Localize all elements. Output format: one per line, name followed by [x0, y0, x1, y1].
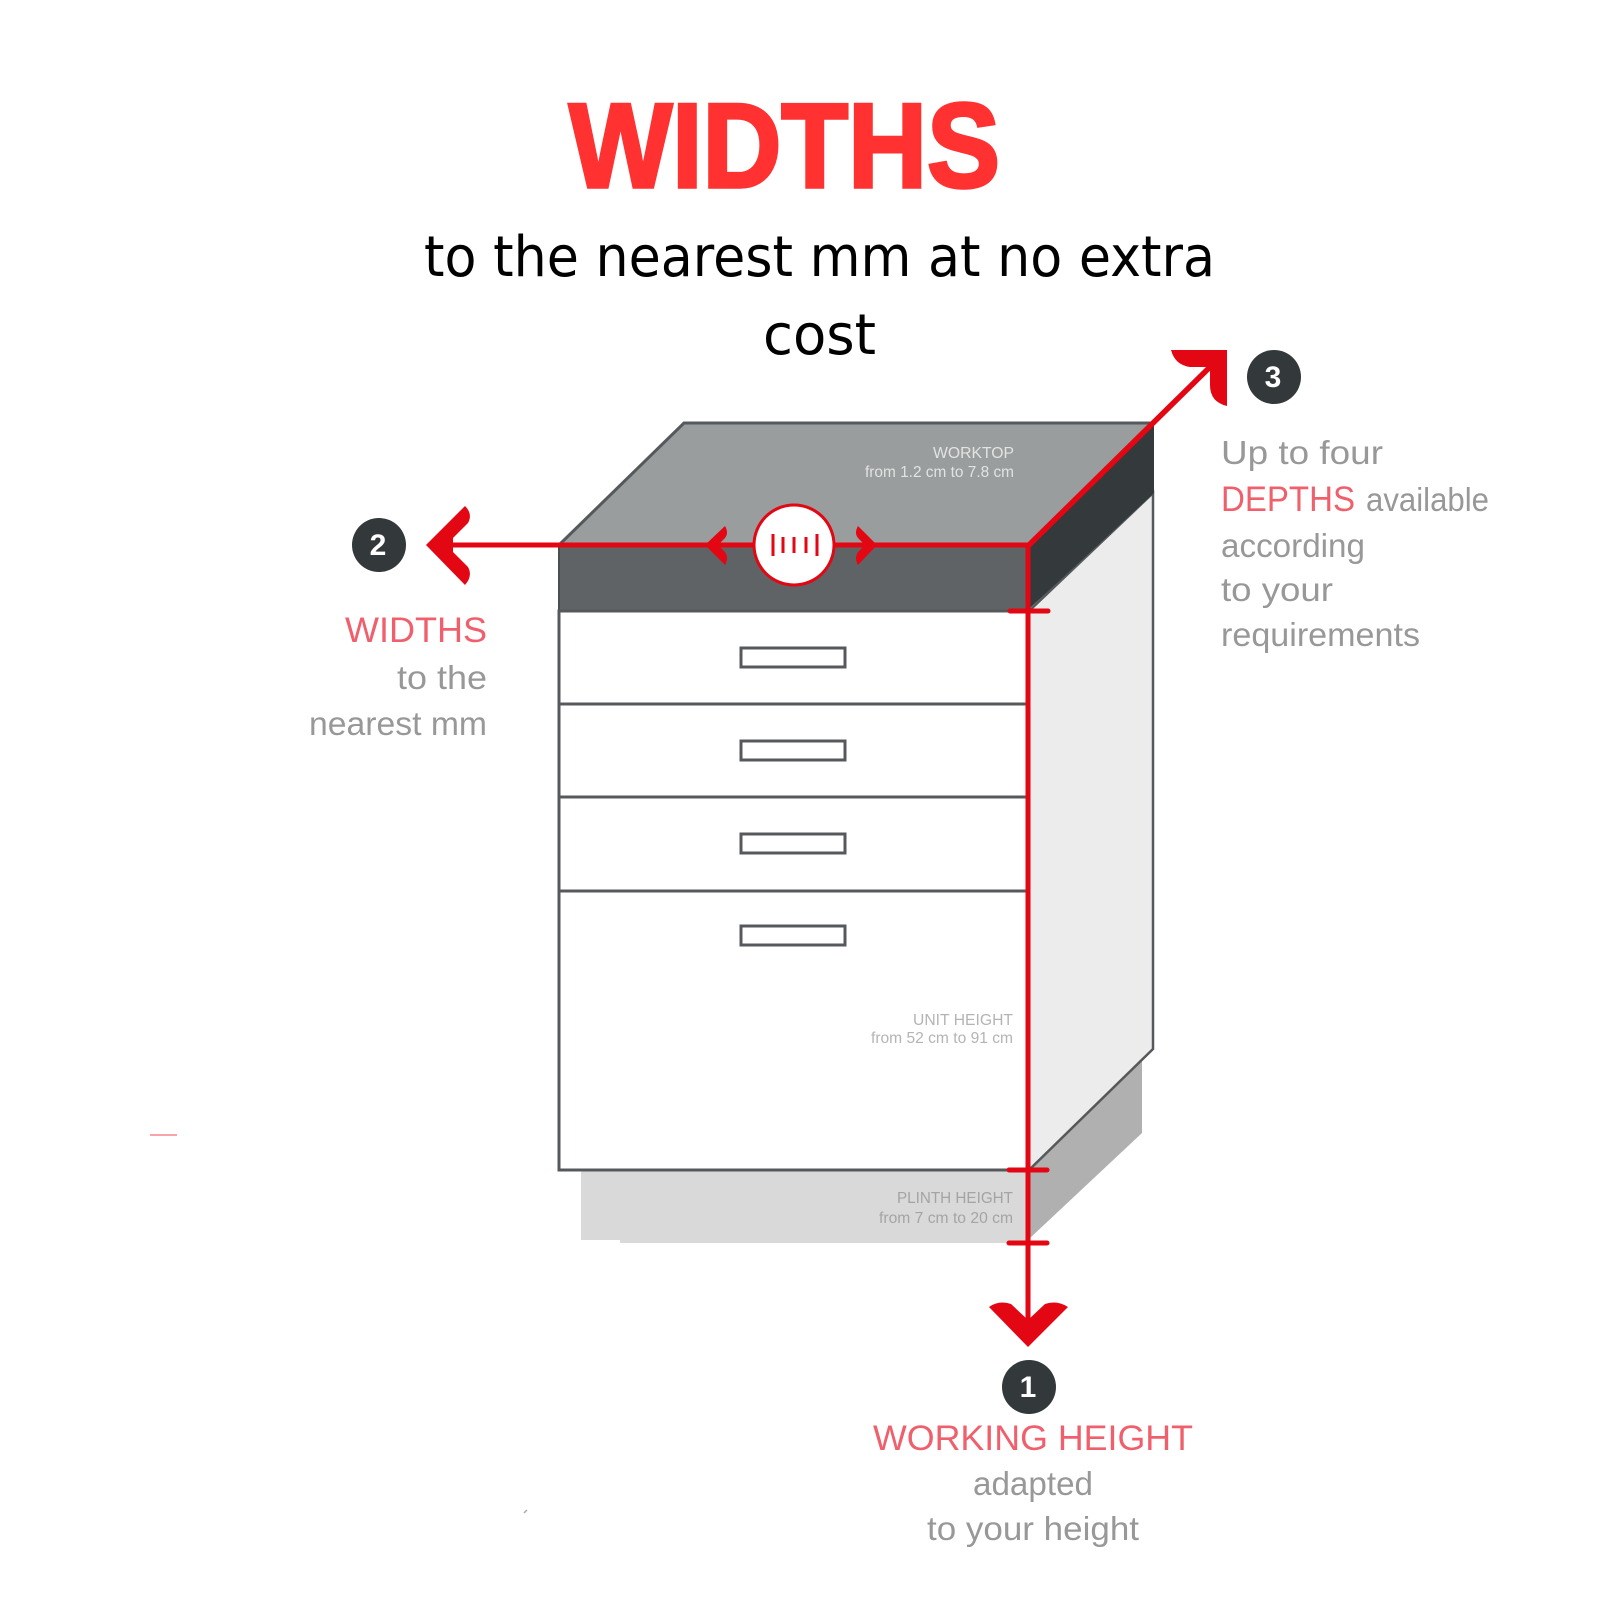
text: depths callout: available [1366, 481, 1489, 518]
worktop label: WORKTOP [933, 445, 1014, 462]
subtitle: cost [763, 303, 876, 368]
arrow: height [989, 545, 1068, 1347]
text: depths callout: DEPTHS [1221, 480, 1355, 519]
icon: small left arrow [705, 526, 727, 565]
text: depths callout: according [1221, 527, 1365, 564]
text: depths callout: requirements [1221, 616, 1420, 653]
badge 3 [1247, 350, 1301, 404]
cabinet illustration [559, 423, 1154, 1243]
subtitle [424, 225, 1215, 368]
worktop side [1029, 423, 1154, 609]
worktop label [865, 445, 1014, 481]
worktop top surface [559, 423, 1153, 545]
text: working height callout: to your height [927, 1510, 1139, 1547]
side panel [1029, 493, 1153, 1170]
text: working height callout: WORKING HEIGHT [873, 1419, 1193, 1458]
unit height label [871, 1012, 1013, 1047]
unit height label: from 52 cm to 91 cm [871, 1030, 1013, 1047]
title: WIDTHS [569, 79, 1000, 213]
cabinet front with drawers [559, 611, 1029, 1170]
arrow: width [426, 506, 1028, 585]
text: widths callout: nearest mm [309, 705, 487, 742]
badge 1 [1002, 1360, 1056, 1414]
plinth height label: PLINTH HEIGHT [897, 1190, 1013, 1207]
subtitle: to the nearest mm at no extra [424, 225, 1215, 290]
badge 3: 3 [1265, 361, 1281, 394]
unit height label: UNIT HEIGHT [913, 1012, 1013, 1029]
arrow: depth [1028, 350, 1227, 546]
plinth height label: from 7 cm to 20 cm [879, 1210, 1013, 1227]
text: widths callout [309, 611, 487, 742]
plinth height label [879, 1190, 1013, 1227]
icon: small right arrow [856, 526, 877, 565]
badge 1: 1 [1020, 1371, 1036, 1404]
text: working height callout: adapted [973, 1465, 1093, 1502]
badge 2 [352, 518, 406, 572]
worktop label: from 1.2 cm to 7.8 cm [865, 464, 1014, 481]
text: depths callout: Up to four [1221, 434, 1383, 471]
text: depths callout: to your [1221, 571, 1333, 608]
text: widths callout: to the [397, 659, 487, 696]
text: widths callout: WIDTHS [345, 611, 487, 650]
text: working height callout [873, 1419, 1193, 1547]
badge 2: 2 [370, 529, 386, 562]
plinth [581, 1060, 1142, 1243]
icon: measure badge [754, 505, 834, 585]
text: depths callout [1221, 434, 1489, 653]
worktop front [559, 545, 1029, 611]
